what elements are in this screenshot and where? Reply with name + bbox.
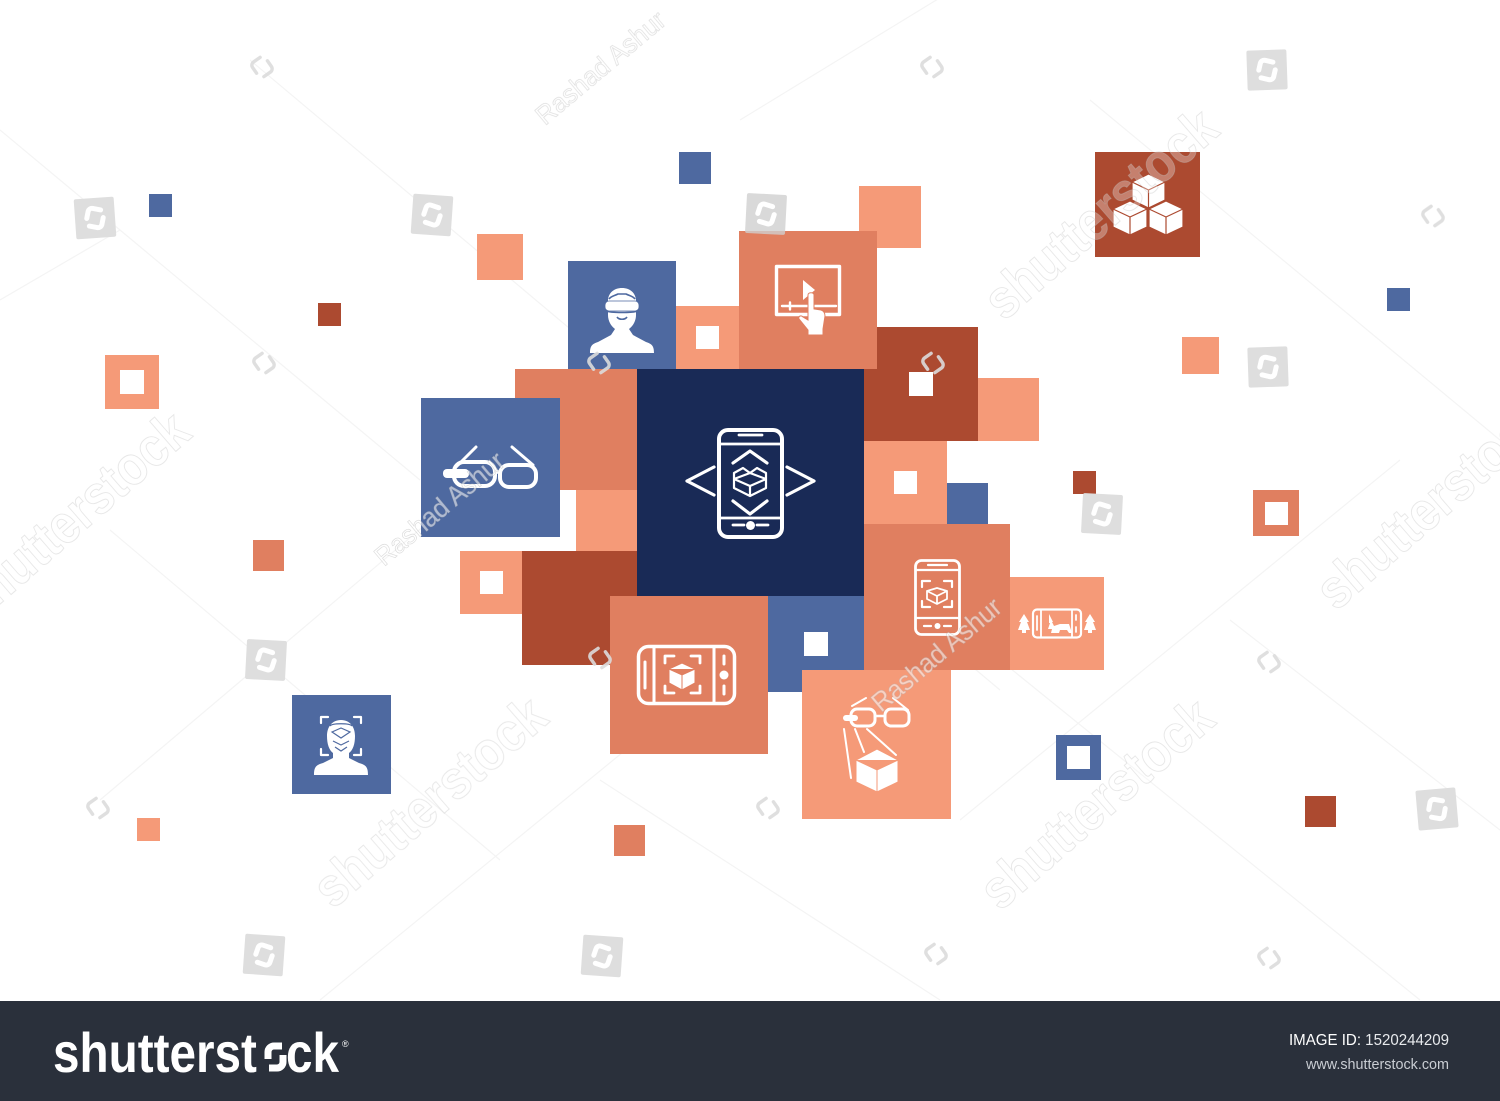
icon: face recognition: [314, 717, 368, 775]
panel: light square top right of cluster: [859, 186, 921, 248]
panel: video tutorial tile: [739, 231, 877, 369]
panel: landscape phone tile: [610, 596, 768, 754]
watermark: shutterstock diagonal text: shutterstock: [300, 683, 558, 919]
panel: phone scan tile: [864, 524, 1010, 670]
panel: light square right of dark tile: [978, 378, 1039, 441]
watermark: Rashad Ashur diagonal text: [369, 5, 1007, 718]
panel: light tile with white square right: [864, 441, 947, 524]
footer image id: IMAGE ID: 1520244209: [1289, 1032, 1449, 1049]
watermark: grey logo badges: [74, 49, 1459, 977]
panel: glasses and cube tile: [802, 670, 951, 819]
watermark: Rashad Ashur diagonal text: Rashad Ashur: [369, 446, 510, 572]
panel: light tile with white square left: [460, 551, 522, 614]
panel: dark square lower left: [522, 551, 637, 665]
panel: small blue square: [947, 483, 988, 524]
framed square: blue lower right: [1056, 735, 1101, 780]
panel: dark tile with white square: [864, 327, 978, 441]
icon: vertical phone with cube scan: [916, 560, 960, 634]
panel: VR user tile: [568, 261, 676, 369]
footer logo: ®: [342, 1039, 349, 1049]
panel: face scan icon tile: [292, 695, 391, 794]
watermark: shutterstock diagonal text: shutterstock: [967, 685, 1225, 921]
scattered squares: [137, 152, 1410, 856]
icon: phone with bear and trees: [1018, 610, 1096, 638]
framed square: light orange left: [105, 355, 159, 409]
watermark: Rashad Ashur diagonal text: Rashad Ashur: [866, 592, 1007, 718]
panel: light square below orange tile: [576, 490, 637, 551]
panel: navy central tile: [637, 369, 864, 596]
icon: landscape phone with cube: [638, 646, 734, 704]
panel: blue tile with white square: [768, 596, 864, 692]
icon: smart glasses: [443, 447, 536, 487]
icon: AR smartphone: [687, 430, 814, 537]
icon: video touch: [776, 266, 840, 335]
watermark: shutterstock diagonal text: shutterstock: [971, 95, 1229, 331]
footer website: www.shutterstock.com: [1305, 1057, 1449, 1073]
icon: stacked cubes: [1113, 174, 1183, 235]
footer logo: shutterstock: [53, 1021, 340, 1084]
watermark: small swirl marks: [86, 55, 1445, 970]
icon: VR headset person: [590, 288, 654, 353]
watermark: Rashad Ashur diagonal text: Rashad Ashur: [530, 5, 671, 131]
icon: glasses projecting cube: [843, 698, 909, 792]
framed square: orange right: [1253, 490, 1299, 536]
panel: smart glasses tile: [421, 398, 560, 537]
footer bar: [0, 1001, 1500, 1101]
panel: landscape AR tile: [1010, 577, 1104, 670]
panel: cubes icon tile: [1095, 152, 1200, 257]
panel: orange tile behind glasses: [515, 369, 637, 490]
panel: light tile with white square: [676, 306, 739, 369]
